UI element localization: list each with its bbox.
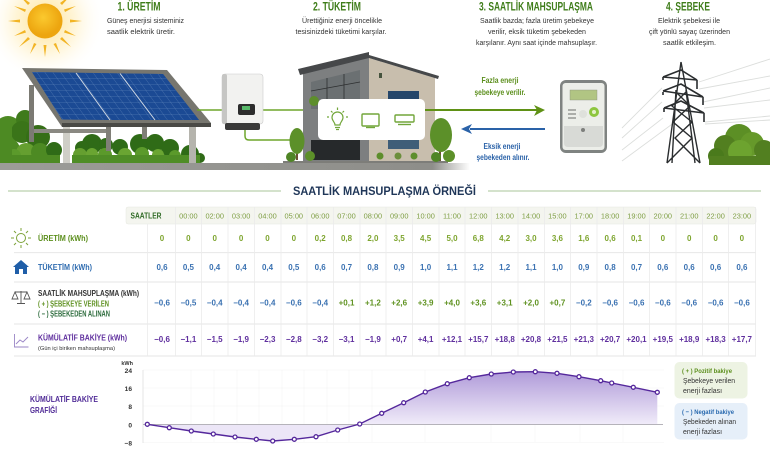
row: production: 0	[740, 234, 745, 243]
row: cumulative balance: +21,3	[574, 335, 594, 344]
icon: left small tree	[286, 128, 315, 162]
row: production: 0,6	[605, 234, 616, 243]
row: production: 1,6	[578, 234, 590, 243]
row: hourly netting: +0,7	[550, 298, 566, 308]
row: consumption: 0,6	[684, 263, 695, 272]
row: cumulative balance: −1,1	[181, 335, 197, 344]
table: hourly netting	[11, 207, 756, 356]
row: production: 3,5	[394, 234, 405, 243]
chart title: KÜMÜLATİF BAKİYE	[30, 395, 99, 404]
row: production: 0	[661, 234, 666, 243]
y axis labels: 8	[128, 404, 132, 411]
row: cumulative balance: −1,9	[365, 335, 381, 344]
row: cumulative balance: +21,5	[547, 335, 568, 344]
row: consumption: 0,9	[578, 263, 590, 272]
row: production: 0	[265, 234, 270, 243]
label: shortage energy: şebekeden alınır.	[476, 153, 530, 162]
row: cumulative balance	[14, 334, 753, 352]
table header band: 07:00	[337, 212, 356, 220]
chart: cumulative balance area	[121, 361, 664, 448]
step 2 text	[296, 0, 386, 36]
row: hourly netting: +3,6	[470, 298, 487, 308]
row: cumulative balance: +17,7	[732, 335, 753, 344]
row: production: 0	[239, 234, 244, 243]
y axis labels	[121, 361, 134, 448]
y axis labels: kWh	[121, 361, 134, 367]
step 1 text: saatlik elektrik üretir.	[107, 27, 175, 36]
row: consumption: 0,6	[315, 263, 326, 272]
icon: left bushes	[0, 110, 62, 163]
row: hourly netting: −0,4	[207, 298, 223, 308]
row: cumulative balance: −2,8	[286, 335, 302, 344]
row: hourly netting: −0,6	[602, 298, 619, 308]
row: production: 0,2	[315, 234, 326, 243]
step 2 text: tesisinizdeki tüketimi karşılar.	[296, 27, 386, 36]
icon: right tree	[708, 124, 770, 165]
row: cumulative balance: +20,1	[626, 335, 647, 344]
table header band: 02:00	[205, 212, 224, 220]
row: consumption: 0,4	[209, 263, 221, 272]
row: consumption: 1,1	[446, 263, 458, 272]
y axis labels: −8	[124, 440, 132, 448]
legend: negative balance: Şebekeden alınan	[683, 419, 736, 426]
step 1 text: Güneş enerjisi sisteminiz	[107, 16, 184, 25]
row: hourly netting: −0,4	[233, 298, 250, 308]
y axis labels: 16	[125, 386, 132, 393]
row: cumulative balance: +0,7	[391, 335, 408, 344]
table header band: 13:00	[495, 212, 514, 220]
legend: negative balance	[674, 403, 748, 440]
row: hourly netting: +3,9	[418, 298, 434, 308]
table header band: 20:00	[654, 212, 672, 220]
table header band: 06:00	[311, 212, 329, 220]
row: hourly netting: −0,6	[708, 298, 724, 308]
row: production: 0,1	[631, 234, 643, 243]
chart title: GRAFİĞİ	[30, 406, 57, 415]
row: cumulative balance: −1,9	[233, 335, 250, 344]
row: cumulative balance: +12,1	[442, 335, 463, 344]
icon: house	[13, 260, 29, 274]
row: hourly netting: +2,6	[391, 298, 408, 308]
row: production: 4,5	[420, 234, 432, 243]
row: cumulative balance: −3,2	[312, 335, 329, 344]
step 4 text: saatlik etkileşim.	[663, 38, 716, 47]
table header band: 10:00	[416, 212, 435, 220]
row: consumption: 1,1	[525, 263, 537, 272]
row: hourly netting: −0,6	[655, 298, 671, 308]
row: hourly netting: ( − ) ŞEBEKEDEN ALINAN	[38, 310, 110, 318]
row: production: 0,8	[341, 234, 353, 243]
row: hourly netting: +4,0	[444, 298, 460, 308]
y axis labels: 0	[128, 422, 132, 430]
row: consumption: 0,6	[657, 263, 669, 272]
row: hourly netting: ( + ) ŞEBEKEYE VERİLEN	[38, 300, 109, 308]
table header band: 04:00	[258, 212, 277, 220]
table header band: 09:00	[390, 212, 408, 220]
area fill positive	[360, 372, 657, 424]
table header band: 17:00	[575, 212, 593, 220]
arrow: shortage from grid	[461, 124, 545, 134]
legend: negative balance: enerji fazlası	[683, 429, 722, 436]
row: production	[11, 228, 745, 248]
row: production: 6,8	[473, 234, 484, 243]
row: consumption: 0,6	[710, 263, 722, 272]
row: consumption: 1,2	[499, 263, 511, 272]
row: cumulative balance: +20,8	[521, 335, 542, 344]
row: cumulative balance: +4,1	[418, 335, 434, 344]
legend: positive balance: Şebekeye verilen	[683, 378, 735, 385]
legend: negative balance: ( − ) Negatif bakiye	[682, 409, 734, 416]
row: production: 0	[212, 234, 217, 243]
row: consumption: 0,8	[605, 263, 616, 272]
row: cumulative balance: (Gün içi biriken mahsuplaşma)	[38, 346, 115, 352]
table header band: 19:00	[627, 212, 646, 220]
step 4 text: çift yönlü sayaç üzerinden	[649, 27, 730, 36]
row: cumulative balance: KÜMÜLATİF BAKİYE (kWh)	[38, 334, 127, 342]
step 3 text	[476, 0, 597, 47]
icon: line chart	[14, 334, 28, 347]
row: production: 0	[292, 234, 297, 243]
icon: sun outline	[11, 228, 31, 248]
label: excess energy	[474, 76, 526, 97]
row: production: 4,2	[499, 234, 511, 243]
table header band: 22:00	[706, 212, 725, 220]
step 4 text	[649, 0, 730, 47]
icon: consumption card	[318, 99, 425, 140]
y axis labels: 24	[125, 368, 132, 375]
chart title	[30, 395, 99, 415]
icon: light bulb	[327, 108, 348, 130]
row: consumption: 0,7	[341, 263, 353, 272]
legend: positive balance: ( + ) Pozitif bakiye	[682, 368, 732, 375]
legend: positive balance	[674, 362, 748, 398]
icon: right small tree	[430, 118, 455, 162]
icon: mid bushes	[72, 134, 205, 163]
row: hourly netting: −0,6	[629, 298, 645, 308]
row: cumulative balance: +18,9	[679, 335, 700, 344]
icon: house	[283, 52, 448, 163]
row: consumption: 0,8	[367, 263, 379, 272]
row: consumption: 0,5	[183, 263, 195, 272]
icon: sun	[0, 0, 105, 81]
row: hourly netting: −0,5	[181, 298, 197, 308]
icon: television	[362, 114, 379, 128]
table header band: 18:00	[601, 212, 619, 220]
icon: inverter	[222, 74, 263, 130]
row: consumption: TÜKETİM (kWh)	[38, 263, 92, 272]
row: production: 0	[687, 234, 692, 243]
step 3 text: karşılanır. Aynı saat içinde mahsuplaşır.	[476, 38, 597, 47]
icon: solar panel carport	[22, 68, 211, 163]
table header band: 15:00	[548, 212, 567, 220]
row: consumption: 1,2	[473, 263, 484, 272]
row: production: 2,0	[367, 234, 379, 243]
row: production: 5,0	[446, 234, 458, 243]
row: hourly netting: −0,6	[154, 298, 170, 308]
label: shortage energy	[476, 142, 530, 162]
power lines	[622, 59, 770, 161]
row: cumulative balance: +18,3	[705, 335, 726, 344]
label: excess energy: şebekeye verilir.	[474, 88, 526, 97]
table header band: 03:00	[232, 212, 250, 220]
legend: positive balance: enerji fazlası	[683, 388, 722, 395]
row: cumulative balance: −0,6	[154, 335, 170, 344]
row: hourly netting: +0,1	[339, 298, 355, 308]
row: production: 0	[160, 234, 165, 243]
table header band: 11:00	[443, 212, 461, 220]
row: hourly netting: −0,4	[260, 298, 276, 308]
row: hourly netting: +3,1	[497, 298, 513, 308]
row: consumption: 0,9	[394, 263, 405, 272]
row: hourly netting: −0,2	[576, 298, 592, 308]
row: cumulative balance: −2,3	[260, 335, 276, 344]
row: consumption: 0,6	[736, 263, 748, 272]
step 1 text	[107, 0, 184, 36]
row: production: 0	[713, 234, 718, 243]
ground strip	[0, 163, 470, 170]
row: hourly netting: SAATLİK MAHSUPLAŞMA (kWh)	[38, 289, 139, 298]
label: shortage energy: Eksik enerji	[484, 142, 520, 151]
row: consumption: 0,7	[631, 263, 643, 272]
step 3 text: Saatlik bazda; fazla üretim şebekeye	[480, 16, 594, 25]
row: consumption	[13, 260, 748, 274]
table header band: 14:00	[522, 212, 540, 220]
row: cumulative balance: +18,8	[495, 335, 515, 344]
green cable	[197, 110, 318, 140]
step 2 text: Ürettiğiniz enerji öncelikle	[302, 16, 382, 25]
row: hourly netting: +1,2	[365, 298, 381, 308]
step 4 text: Elektrik şebekesi ile	[658, 16, 720, 25]
row: consumption: 1,0	[552, 263, 564, 272]
row: cumulative balance: −1,5	[207, 335, 223, 344]
row: cumulative balance: −3,1	[339, 335, 355, 344]
row: cumulative balance: +15,7	[468, 335, 489, 344]
table header band: 05:00	[285, 212, 303, 220]
row: production: 3,6	[552, 234, 564, 243]
row: consumption: 0,4	[236, 263, 247, 272]
row: hourly netting: −0,4	[312, 298, 329, 308]
table header band: 08:00	[364, 212, 382, 220]
icon: transmission tower	[663, 62, 704, 163]
row: consumption: 0,5	[288, 263, 300, 272]
row: hourly netting: +2,0	[523, 298, 539, 308]
icon: scales	[12, 291, 30, 304]
line series	[145, 370, 659, 443]
table header band	[126, 207, 756, 224]
row: consumption: 0,4	[262, 263, 274, 272]
table header band: 21:00	[680, 212, 698, 220]
row: consumption: 1,0	[420, 263, 432, 272]
heading: table title: SAATLİK MAHSUPLAŞMA ÖRNEĞİ	[293, 183, 476, 198]
label: excess energy: Fazla enerji	[482, 76, 518, 85]
row: hourly netting: −0,6	[681, 298, 698, 308]
icon: air conditioner	[395, 115, 414, 124]
row: production: ÜRETİM (kWh)	[38, 234, 88, 243]
table header band: 23:00	[733, 212, 751, 220]
icon: bidirectional meter	[560, 80, 607, 153]
row: cumulative balance: +20,7	[600, 335, 621, 344]
area fill negative	[147, 424, 360, 441]
row: hourly netting: −0,6	[286, 298, 302, 308]
row: hourly netting: −0,6	[734, 298, 750, 308]
row: hourly netting	[12, 289, 750, 318]
arrow: excess energy to grid	[425, 105, 545, 116]
table header band: 12:00	[469, 212, 488, 220]
step 3 text: verilir, eksik tüketim şebekeden	[488, 27, 586, 36]
row: consumption: 0,6	[156, 263, 168, 272]
row: production: 0	[186, 234, 191, 243]
panel: hero illustration	[0, 0, 770, 170]
table header band: SAATLER	[130, 210, 162, 220]
table header band: 00:00	[179, 212, 198, 220]
row: production: 3,0	[525, 234, 537, 243]
row: cumulative balance: +19,5	[653, 335, 673, 344]
